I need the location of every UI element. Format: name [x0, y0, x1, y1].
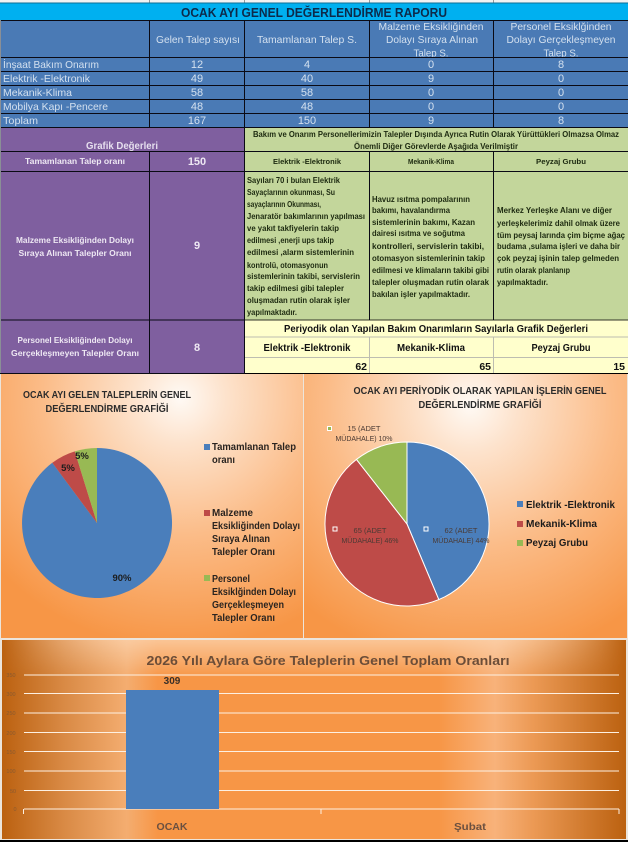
text: mechanical duties: dairesi ısıtma ve soğutma — [372, 228, 465, 238]
text: mechanical duties: otomasyon sistemlerinin takip — [372, 253, 485, 263]
chart title: 2026 Yılı Aylara Göre Taleplerin Genel Toplam Oranları — [146, 653, 510, 668]
table rows: 40 — [301, 73, 313, 85]
pie legend: Eksiklğinden Dolayı — [212, 587, 296, 598]
table rows: 8 — [558, 115, 564, 127]
text: electrical duties: edilmesi ,enerji ups takip — [247, 235, 334, 245]
table header: Malzeme Eksikliğinden — [378, 21, 484, 33]
pie legend: Gerçekleşmeyen — [212, 600, 284, 611]
text: landscaping duties: yerleşkelerimiz dahil olmak üzere — [497, 218, 620, 228]
completed rate — [25, 156, 206, 168]
column headings — [273, 157, 586, 166]
text: mechanical duties: sistemlerinin bakımı, Kazan — [372, 217, 475, 227]
pie legend: Tamamlanan Talep — [212, 442, 296, 453]
text: electrical duties: Jenaratör bakımlarının yapılması — [247, 211, 365, 221]
periodic column headings: Peyzaj Grubu — [532, 343, 590, 354]
pie legend: Peyzaj Grubu — [526, 537, 588, 549]
gridlines and y axis: 0 — [13, 807, 17, 813]
pie legend: Sıraya Alınan — [212, 534, 270, 545]
pie legend: oranı — [212, 455, 235, 466]
text: electrical duties: takip edilmesi gibi talepler — [247, 283, 345, 293]
pie chart: request shares: 5% — [75, 451, 89, 462]
text: landscaping duties: çok peyzaj işinin talep gelmeden — [497, 253, 619, 263]
title: OCAK AYI GENEL DEĞERLENDİRME RAPORU — [181, 5, 447, 20]
routine heading: Önemli Diğer Görevlerde Aşağıda Verilmiştir — [354, 142, 518, 151]
personnel shortage rate: Personel Eksikliğinden Dolayı — [18, 335, 132, 345]
table rows: 48 — [191, 101, 203, 113]
pie legend: Mekanik-Klima — [526, 518, 597, 530]
periodic column headings: Mekanik-Klima — [397, 343, 465, 354]
table header: Dolayı Sıraya Alınan — [386, 34, 478, 46]
pie legend: Talepler Oranı — [212, 547, 275, 558]
table rows: 58 — [191, 87, 203, 99]
text: landscaping duties — [497, 205, 625, 287]
pie legend: Personel — [212, 574, 250, 585]
periodic values: 65 — [479, 361, 491, 373]
heading: graph values: Grafik Değerleri — [86, 140, 158, 152]
gridlines and y axis: 50 — [10, 789, 16, 795]
x axis labels: Şubat — [454, 821, 487, 833]
table header: Personel Eksiklğinden — [510, 21, 612, 33]
text: electrical duties: kontrolü, otomasyonun — [247, 260, 328, 270]
completed rate: Tamamlanan Talep oranı — [25, 156, 125, 166]
column headings: Elektrik -Elektronik — [273, 157, 342, 166]
material shortage rate: 9 — [194, 240, 200, 252]
panel: January periodic work pie chart — [304, 374, 627, 638]
gridlines and y axis: 100 — [6, 769, 16, 775]
pie legend: Talepler Oranı — [212, 613, 275, 624]
pie legend: Malzeme — [212, 508, 253, 519]
pie chart: periodic work: 62 (ADET — [445, 526, 478, 535]
table rows: 0 — [558, 73, 564, 85]
bar: January: 309 — [164, 676, 181, 687]
pie chart: periodic work — [325, 424, 490, 606]
text: mechanical duties: bakımı, havalandırma — [372, 205, 450, 215]
table rows: 8 — [558, 59, 564, 71]
pie chart: periodic work: MÜDAHALE) 44% — [432, 536, 490, 545]
pie legend: Elektrik -Elektronik — [526, 499, 615, 511]
table rows: 4 — [304, 59, 310, 71]
table rows: 0 — [428, 101, 434, 113]
completed rate: 150 — [188, 156, 206, 168]
text: landscaping duties: Merkez Yerleşke Alanı ve diğer — [497, 205, 613, 215]
table header: Talep S. — [544, 48, 578, 60]
column headings: Peyzaj Grubu — [536, 157, 586, 166]
bar: January — [126, 676, 219, 809]
gridlines and y axis: 350 — [6, 673, 16, 679]
table rows: 0 — [428, 87, 434, 99]
x axis labels: OCAK — [156, 821, 188, 833]
gridlines and y axis: 150 — [6, 750, 16, 756]
pie chart: periodic work: 15 (ADET — [348, 424, 381, 433]
text: electrical duties: Sayaçlarının okunması, Su — [247, 187, 335, 197]
routine heading: Bakım ve Onarım Personellerimizin Talepler Dışında Ayrıca Rutin Olarak Yürüttükleri Olmazsa Olmaz — [253, 130, 619, 139]
pie legend — [517, 499, 615, 549]
table header: Talep S. — [414, 48, 448, 60]
material shortage rate: Sıraya Alınan Talepler Oranı — [18, 248, 132, 258]
gridlines and y axis: 300 — [6, 692, 16, 698]
table rows: 150 — [298, 115, 316, 127]
table rows: İnşaat Bakım Onarım — [3, 58, 99, 71]
table rows: 0 — [558, 101, 564, 113]
panel: January requests pie chart — [0, 374, 628, 642]
panel: graph values — [0, 127, 245, 373]
personnel shortage rate: 8 — [194, 342, 200, 354]
periodic column headings — [264, 343, 590, 354]
text: mechanical duties: talepler oluşmadan rutin olarak — [372, 277, 489, 287]
text: mechanical duties: Havuz ısıtma pompalarının — [372, 194, 470, 204]
text: electrical duties: sistemlerinin takibi, servislerin — [247, 271, 360, 281]
material shortage rate: Malzeme Eksikliğinden Dolayı — [16, 235, 134, 245]
panel: request table — [0, 20, 628, 128]
personnel shortage rate — [11, 335, 200, 358]
gridlines and y axis: 250 — [6, 711, 16, 717]
text: electrical duties: ve yakıt takfiyelerin takip — [247, 223, 339, 233]
title — [0, 3, 628, 20]
periodic column headings: Elektrik -Elektronik — [264, 343, 351, 354]
table rows: 167 — [188, 115, 206, 127]
material shortage rate — [16, 235, 200, 258]
text: electrical duties — [247, 175, 365, 317]
chart title — [354, 384, 607, 411]
text: electrical duties: edilmesi ,alarm sistemlerinin — [247, 247, 354, 257]
text: mechanical duties: edilmesi ve klimaların takibi gibi — [372, 265, 489, 275]
table rows: 0 — [558, 87, 564, 99]
table rows: Elektrik -Elektronik — [3, 73, 91, 85]
personnel shortage rate: Gerçekleşmeyen Talepler Oranı — [11, 348, 139, 358]
panel: routine duties — [245, 127, 628, 320]
panel: monthly totals bar chart — [0, 639, 628, 840]
pie chart: request shares: 90% — [112, 573, 132, 584]
pie legend — [204, 442, 300, 624]
text: electrical duties: oluşmadan rutin olarak işler — [247, 295, 351, 305]
table rows: Mekanik-Klima — [3, 87, 72, 99]
pie legend: Eksikliğinden Dolayı — [212, 521, 300, 532]
gridlines and y axis — [6, 673, 619, 814]
table rows: 9 — [428, 73, 434, 85]
table rows: 0 — [428, 59, 434, 71]
chart title: OCAK AYI GELEN TALEPLERİN GENEL — [23, 388, 191, 401]
x axis labels — [156, 821, 487, 833]
column headings: Mekanik-Klima — [408, 157, 455, 166]
table header — [156, 21, 616, 60]
pie chart: request shares: 5% — [61, 463, 75, 474]
panel: periodic maintenance values — [245, 320, 628, 373]
text: landscaping duties: rutin olarak planlanıp — [497, 265, 570, 275]
table rows — [3, 58, 564, 127]
table rows: Toplam — [3, 115, 38, 127]
table rows: 48 — [301, 101, 313, 113]
routine heading — [253, 130, 619, 151]
periodic values: 62 — [355, 361, 367, 373]
pie chart: periodic work: 65 (ADET — [354, 526, 387, 535]
chart title: DEĞERLENDİRME GRAFİĞİ — [46, 402, 169, 415]
text: landscaping duties: yapılmaktadır. — [497, 277, 548, 287]
table header: Gelen Talep sayısı — [156, 34, 240, 46]
text: mechanical duties: kontrolleri, servislerin takibi, — [372, 241, 484, 251]
periodic values — [355, 361, 625, 373]
periodic heading: Periyodik olan Yapılan Bakım Onarımların Sayılarla Grafik Değerleri — [284, 324, 588, 335]
table rows: Mobilya Kapı -Pencere — [3, 101, 108, 113]
text: mechanical duties: bakılan işler yapılmaktadır. — [372, 289, 470, 299]
table rows: 12 — [191, 59, 203, 71]
text: mechanical duties — [372, 194, 489, 299]
table header: Dolayı Gerçekleşmeyen — [506, 34, 616, 46]
table header: Tamamlanan Talep S. — [257, 34, 357, 46]
pie chart: periodic work: MÜDAHALE) 10% — [336, 434, 393, 443]
top strip — [0, 0, 628, 3]
pie chart: periodic work: MÜDAHALE) 46% — [342, 536, 399, 545]
text: electrical duties: yapılmaktadır. — [247, 307, 297, 317]
table rows: 9 — [428, 115, 434, 127]
table grid lines — [0, 2, 628, 374]
chart title: DEĞERLENDİRME GRAFİĞİ — [418, 398, 542, 411]
table rows: 49 — [191, 73, 203, 85]
gridlines and y axis: 200 — [6, 731, 16, 737]
table rows: 58 — [301, 87, 313, 99]
chart title — [23, 388, 191, 415]
text: electrical duties: Sayıları 70 i bulan Elektrik — [247, 175, 340, 185]
pie chart: request shares — [22, 448, 172, 598]
text: electrical duties: sayaçlarının Okunması, — [247, 199, 321, 209]
periodic values: 15 — [613, 361, 625, 373]
